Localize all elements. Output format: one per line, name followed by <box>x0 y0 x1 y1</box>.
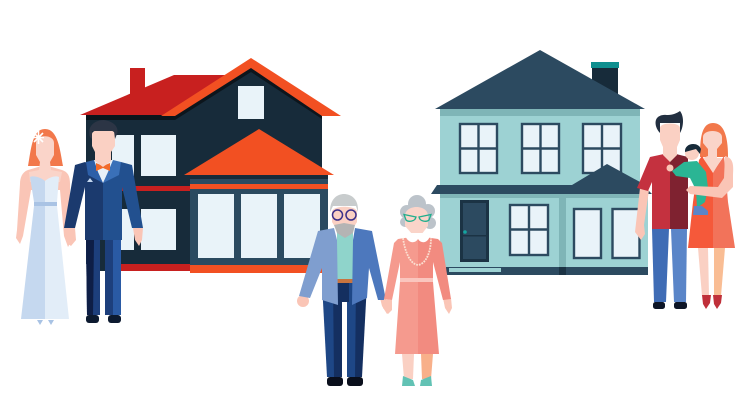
main roof <box>435 50 645 109</box>
house: teal house <box>431 50 652 275</box>
roof shadow <box>86 66 322 120</box>
jacket right <box>352 228 386 305</box>
collar <box>405 233 430 242</box>
left leg dark <box>333 283 342 377</box>
hair <box>400 195 436 229</box>
face <box>332 207 357 230</box>
shoes <box>653 302 687 309</box>
shoes <box>37 320 54 325</box>
mother arm <box>686 156 733 198</box>
chimney cap <box>591 62 619 68</box>
dress left <box>688 156 713 248</box>
shirt <box>337 228 353 280</box>
extension windows <box>198 194 320 258</box>
belt <box>34 202 57 206</box>
pants <box>652 229 669 302</box>
child foot <box>693 206 708 215</box>
child body <box>672 161 708 208</box>
red roof <box>80 75 225 115</box>
extension wall <box>190 175 328 265</box>
extension base <box>190 265 328 273</box>
jacket left <box>64 162 103 240</box>
upper windows <box>112 135 176 176</box>
lapels <box>86 160 103 183</box>
chimney <box>130 68 145 94</box>
large windows <box>574 209 640 258</box>
step <box>449 268 501 272</box>
legs <box>698 248 709 296</box>
face <box>405 207 428 235</box>
figure: grandfather <box>297 194 391 386</box>
extension orange trim <box>190 184 328 189</box>
hands <box>297 295 309 307</box>
pocket square <box>87 178 93 182</box>
left leg light <box>322 283 335 377</box>
figure: bride <box>16 129 73 325</box>
belt <box>400 278 433 282</box>
right leg light <box>347 283 357 377</box>
hair flower <box>33 131 44 144</box>
jacket right <box>103 162 143 240</box>
hair <box>330 194 358 212</box>
upper windows <box>460 124 621 173</box>
gable window <box>238 86 264 119</box>
shoes <box>402 376 432 386</box>
beard <box>334 223 355 238</box>
belt <box>337 279 353 283</box>
shoes <box>702 295 722 309</box>
house: red and orange house <box>80 58 341 273</box>
hair <box>700 123 728 157</box>
necklace <box>403 238 431 265</box>
porch roof <box>431 164 652 194</box>
dress right <box>418 236 451 354</box>
shirt <box>94 160 113 183</box>
hair <box>89 120 117 139</box>
door <box>460 200 489 262</box>
child hand <box>666 164 674 172</box>
figure: groom <box>64 120 143 323</box>
figure: father <box>635 111 688 309</box>
figure: mother and child <box>666 123 735 309</box>
face and neck <box>703 131 722 173</box>
orange gable roof <box>161 58 341 116</box>
lower window <box>510 205 548 255</box>
glasses <box>404 214 431 221</box>
bow tie <box>96 163 110 171</box>
dress right <box>713 156 735 248</box>
lower wall <box>440 194 648 268</box>
hands <box>65 228 76 246</box>
pants <box>86 240 100 315</box>
arms and shoulders <box>16 165 73 247</box>
legs <box>402 354 414 379</box>
base <box>446 267 648 275</box>
child hair <box>685 144 701 154</box>
trouser top <box>340 283 349 302</box>
extension roof <box>184 129 334 175</box>
floor band <box>122 186 190 191</box>
shirt left <box>637 154 670 229</box>
main body <box>86 66 322 264</box>
face and neck <box>660 124 680 162</box>
right leg dark <box>355 283 367 377</box>
dress left half <box>21 176 45 319</box>
dress left <box>384 236 418 354</box>
figure: grandmother <box>383 195 452 386</box>
lower windows <box>112 209 176 250</box>
face and neck <box>29 136 62 182</box>
arm <box>635 188 649 240</box>
shoes <box>86 315 121 323</box>
hair <box>656 111 683 133</box>
door knob <box>463 230 467 234</box>
neck and face <box>92 130 115 167</box>
chimney <box>592 67 618 97</box>
glasses <box>332 210 356 220</box>
jacket left <box>299 228 338 305</box>
dress right half <box>45 176 69 319</box>
shoes <box>327 377 363 386</box>
hair <box>28 129 63 166</box>
column <box>559 198 566 268</box>
upper wall <box>440 109 640 189</box>
child face <box>685 146 699 160</box>
shirt right <box>670 154 688 229</box>
base band <box>102 264 192 271</box>
hands <box>383 299 392 314</box>
